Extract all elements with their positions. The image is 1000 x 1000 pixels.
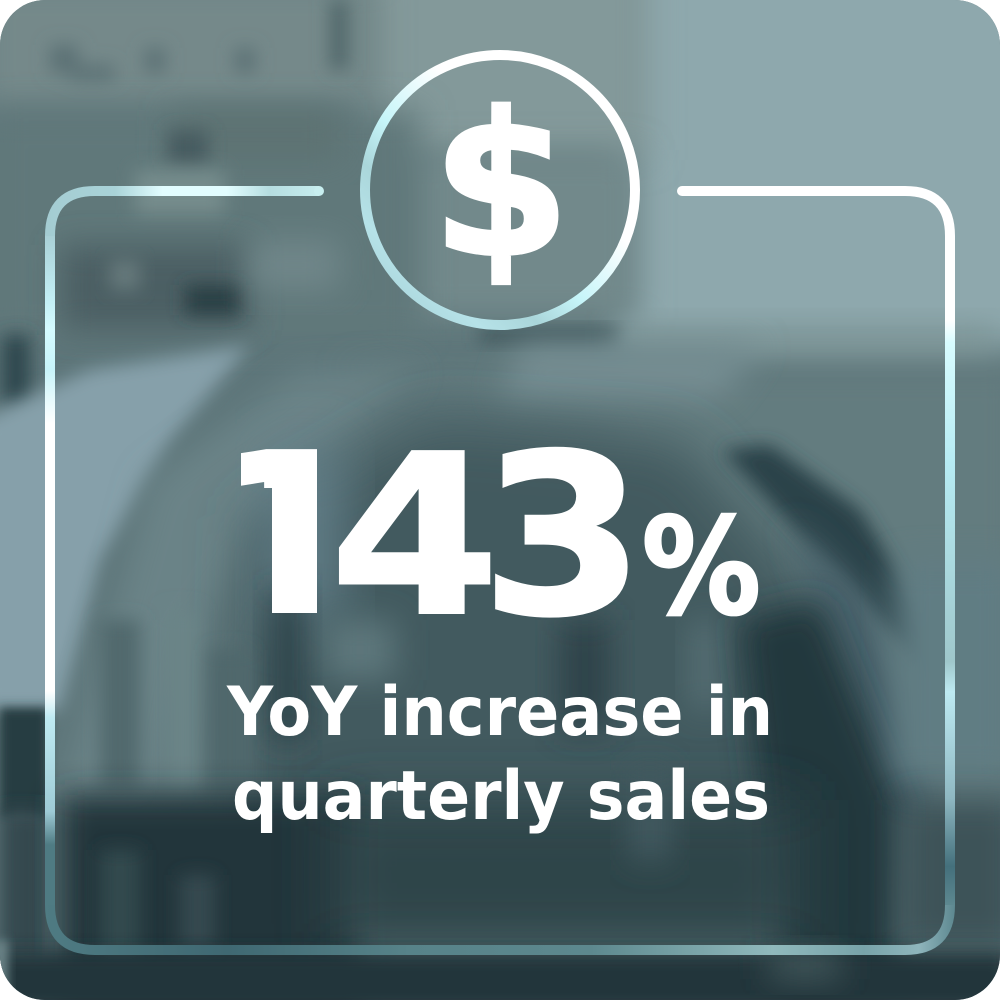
caption: YoY increase in quarterly sales: quarterly sales <box>232 757 770 836</box>
caption: YoY increase in quarterly sales: YoY increase in <box>226 673 773 752</box>
bed upper area <box>618 322 984 336</box>
duvet body <box>72 372 384 786</box>
big number: 143%: 1 <box>185 407 386 666</box>
big number: 143%: 4 <box>329 408 500 666</box>
pillows <box>352 100 431 303</box>
headboard marks <box>50 0 348 81</box>
dark fold lines <box>722 437 911 643</box>
dark lower throw <box>0 708 48 818</box>
big number: 143%: 3 <box>481 407 645 665</box>
caption: YoY increase in quarterly sales <box>226 673 773 836</box>
big number: 143% <box>241 446 758 618</box>
big number: 143%: % <box>642 489 761 645</box>
back wall <box>620 0 1000 350</box>
shadow under ring <box>480 328 620 344</box>
rounded frame <box>50 186 950 950</box>
light blanket left <box>0 345 250 710</box>
icon: dollar sign in circle: $ <box>432 70 570 301</box>
blanket stripes <box>100 620 140 790</box>
icon: dollar sign in circle <box>365 55 635 325</box>
